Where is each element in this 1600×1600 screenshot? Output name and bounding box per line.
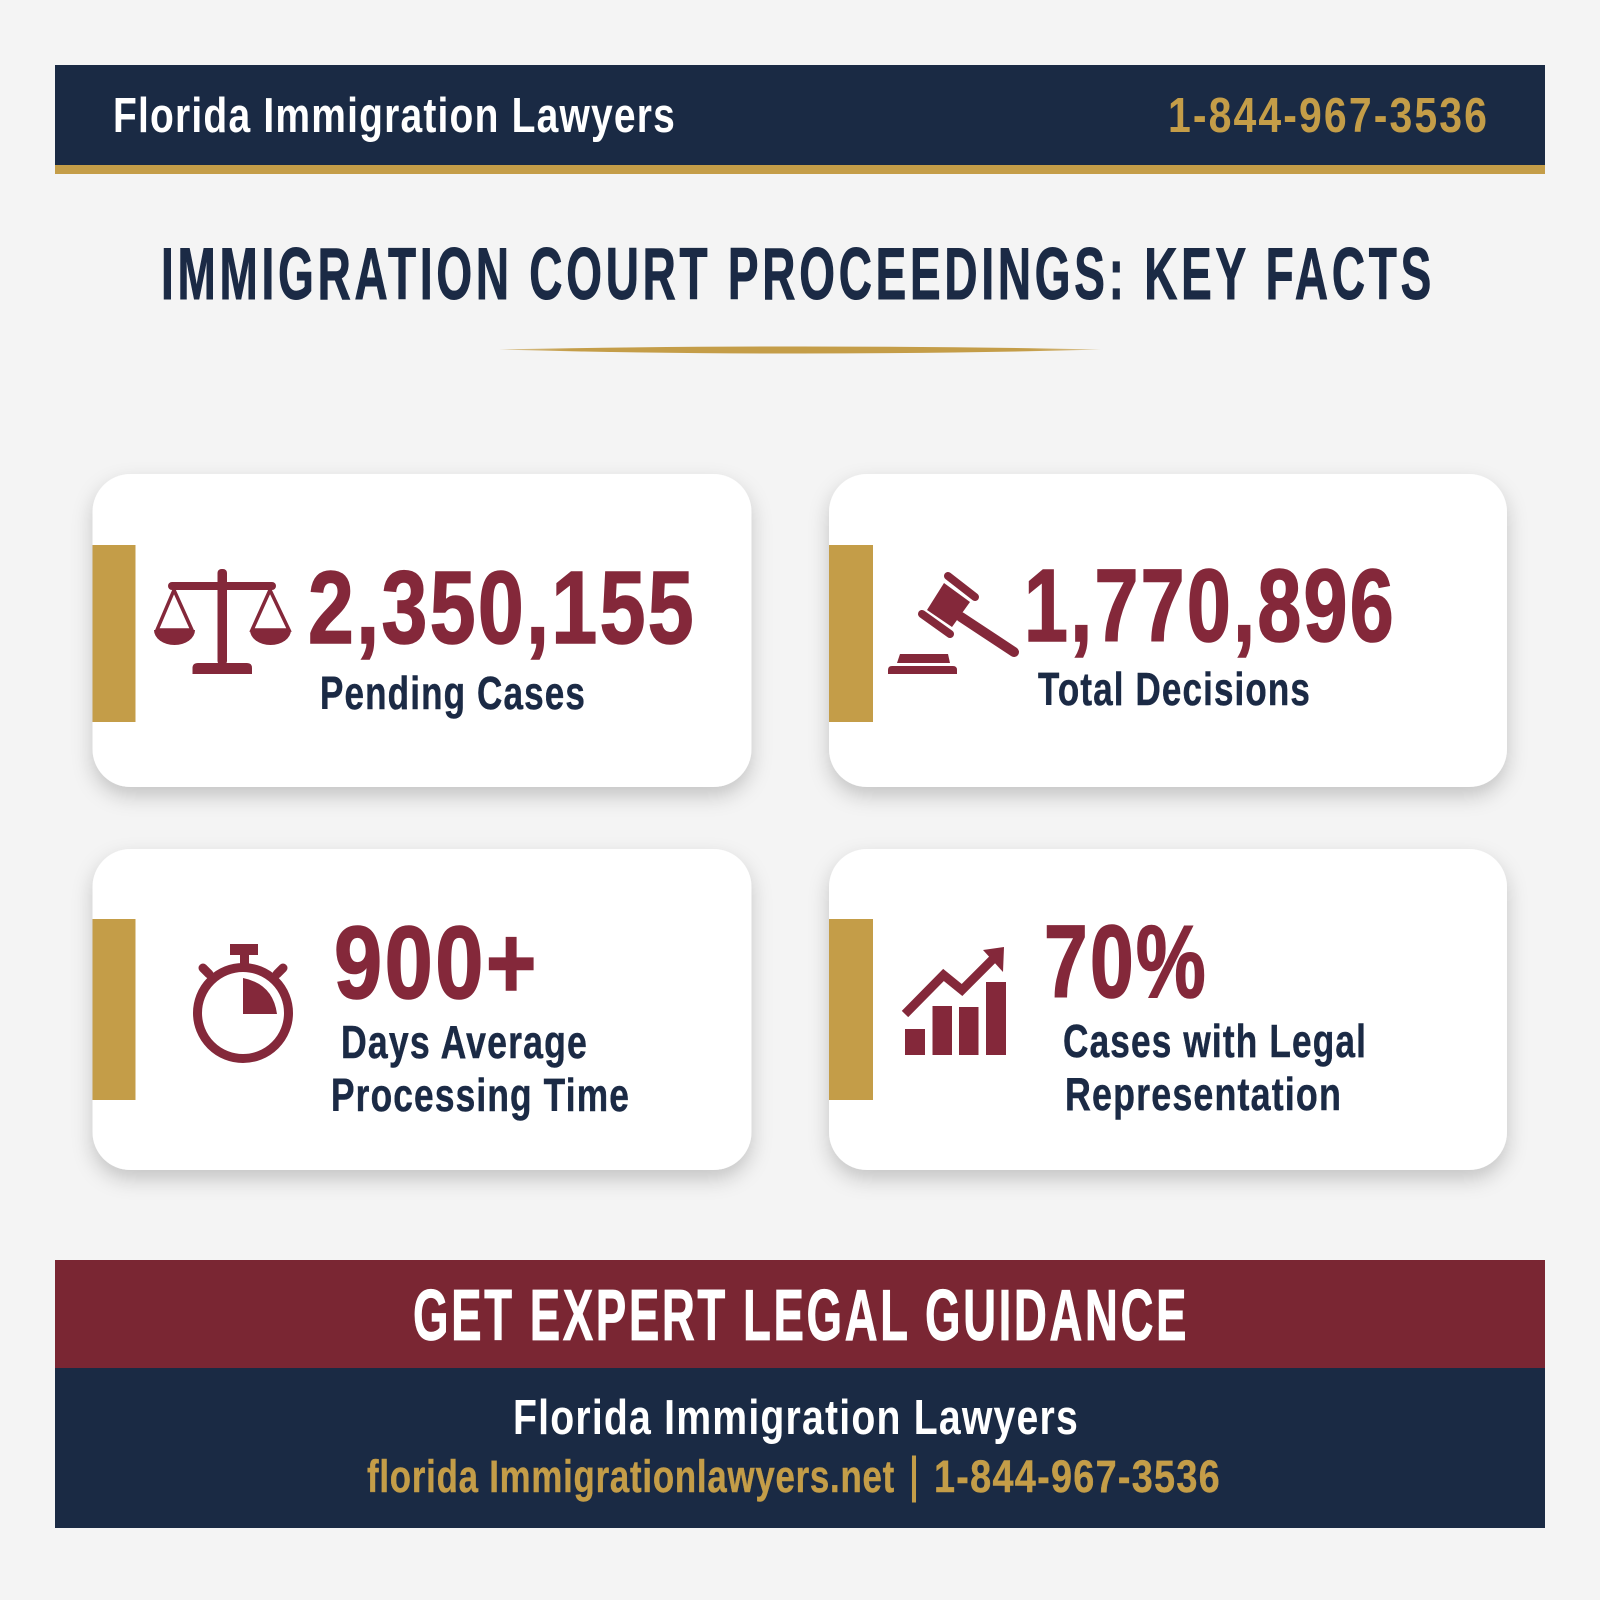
title underline (499, 346, 1101, 354)
icon: gavel (888, 576, 1014, 674)
legal representation number: 70% (1044, 904, 1208, 1019)
header phone number: 1-844-967-3536 (1168, 89, 1489, 143)
processing time label: Days Average (341, 1016, 588, 1068)
header firm name: Florida Immigration Lawyers (113, 89, 676, 143)
total decisions label: Total Decisions (1038, 663, 1311, 715)
footer contact panel (55, 1368, 1545, 1528)
panel: total decisions (829, 474, 1507, 787)
icon: scales of justice (154, 569, 291, 674)
processing time label (331, 1016, 630, 1121)
panel: average processing time (92, 849, 752, 1170)
processing time label: Processing Time (331, 1069, 630, 1121)
call to action banner (55, 1260, 1545, 1368)
pending cases label: Pending Cases (320, 667, 586, 719)
panel: pending cases (92, 474, 752, 787)
footer contact line: 1-844-967-3536 (934, 1451, 1221, 1502)
legal representation label: Representation (1065, 1068, 1342, 1120)
icon: rising bar chart (905, 947, 1006, 1055)
call to action heading: GET EXPERT LEGAL GUIDANCE (413, 1276, 1189, 1356)
footer contact line: | (908, 1447, 920, 1503)
total decisions number: 1,770,896 (1024, 548, 1396, 663)
icon: stopwatch (198, 944, 288, 1058)
footer contact line: florida Immigrationlawyers.net (367, 1451, 895, 1502)
legal representation label (1063, 1015, 1367, 1120)
pending cases number: 2,350,155 (308, 550, 696, 665)
legal representation label: Cases with Legal (1063, 1015, 1367, 1067)
processing time number: 900+ (334, 905, 539, 1020)
footer firm name: Florida Immigration Lawyers (513, 1391, 1079, 1445)
panel: legal representation (829, 849, 1507, 1170)
header bar (55, 65, 1545, 174)
